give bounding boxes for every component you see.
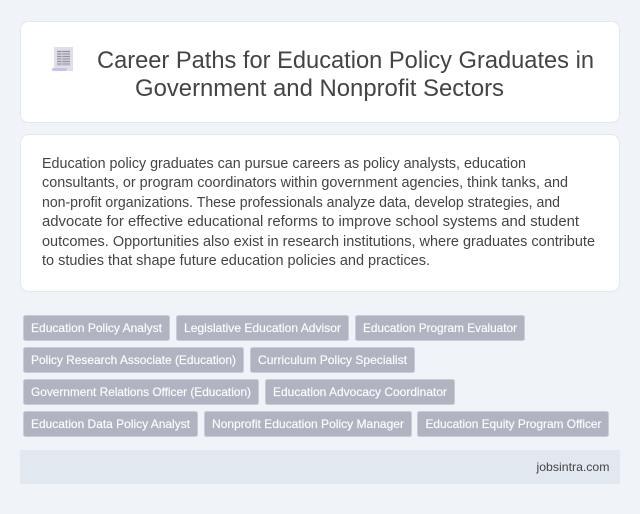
text block: description: to studies that shape future education policies and practices. bbox=[42, 253, 430, 269]
tag: Education Equity Program Officer: Education Equity Program Officer bbox=[426, 417, 602, 431]
text block: description: Education policy graduates can pursue careers as policy analysts, education bbox=[42, 156, 526, 172]
tag: Education Policy Analyst: Education Policy Analyst bbox=[31, 321, 163, 335]
tag: Legislative Education Advisor bbox=[176, 316, 348, 340]
panel: description bbox=[20, 134, 620, 292]
tag: Nonprofit Education Policy Manager: Nonprofit Education Policy Manager bbox=[212, 417, 404, 431]
text block: description: consultants, or program coordinators within government agencies, think tanks, and bbox=[42, 175, 568, 191]
tag: Education Policy Analyst bbox=[24, 316, 170, 340]
tag: Education Advocacy Coordinator bbox=[266, 380, 454, 404]
panel: header bbox=[20, 22, 620, 122]
tag: Education Program Evaluator: Education Program Evaluator bbox=[363, 321, 517, 335]
tags bbox=[24, 316, 608, 436]
tag: Curriculum Policy Specialist: Curriculum Policy Specialist bbox=[258, 353, 408, 367]
tag: Education Data Policy Analyst: Education Data Policy Analyst bbox=[31, 417, 191, 431]
text block: description: outcomes. Opportunities also exist in research institutions, where graduates contribute bbox=[42, 234, 595, 250]
icon: document scroll bbox=[52, 47, 73, 71]
title: Government and Nonprofit Sectors bbox=[135, 75, 504, 102]
title bbox=[97, 47, 594, 102]
tag: Policy Research Associate (Education): Policy Research Associate (Education) bbox=[31, 353, 236, 367]
text block: description: non-profit organizations. These professionals analyze data, develop strategies, and bbox=[42, 195, 560, 211]
tag: Education Program Evaluator bbox=[356, 316, 524, 340]
footer credit: jobsintra.com bbox=[535, 460, 610, 474]
tag: Government Relations Officer (Education) bbox=[24, 380, 258, 404]
tag: Nonprofit Education Policy Manager bbox=[204, 412, 412, 436]
tag: Education Advocacy Coordinator: Education Advocacy Coordinator bbox=[273, 385, 447, 399]
text block: description: advocate for effective educational reforms to improve school systems and student bbox=[42, 214, 579, 230]
tag: Legislative Education Advisor: Legislative Education Advisor bbox=[184, 321, 341, 335]
tag: Education Data Policy Analyst bbox=[24, 412, 198, 436]
tag: Curriculum Policy Specialist bbox=[250, 348, 414, 372]
footer bbox=[20, 450, 620, 484]
title: Career Paths for Education Policy Graduates in bbox=[97, 47, 594, 74]
text block: description bbox=[42, 156, 595, 269]
tag: Government Relations Officer (Education): Government Relations Officer (Education) bbox=[31, 385, 251, 399]
tag: Policy Research Associate (Education) bbox=[24, 348, 244, 372]
tag: Education Equity Program Officer bbox=[418, 412, 608, 436]
